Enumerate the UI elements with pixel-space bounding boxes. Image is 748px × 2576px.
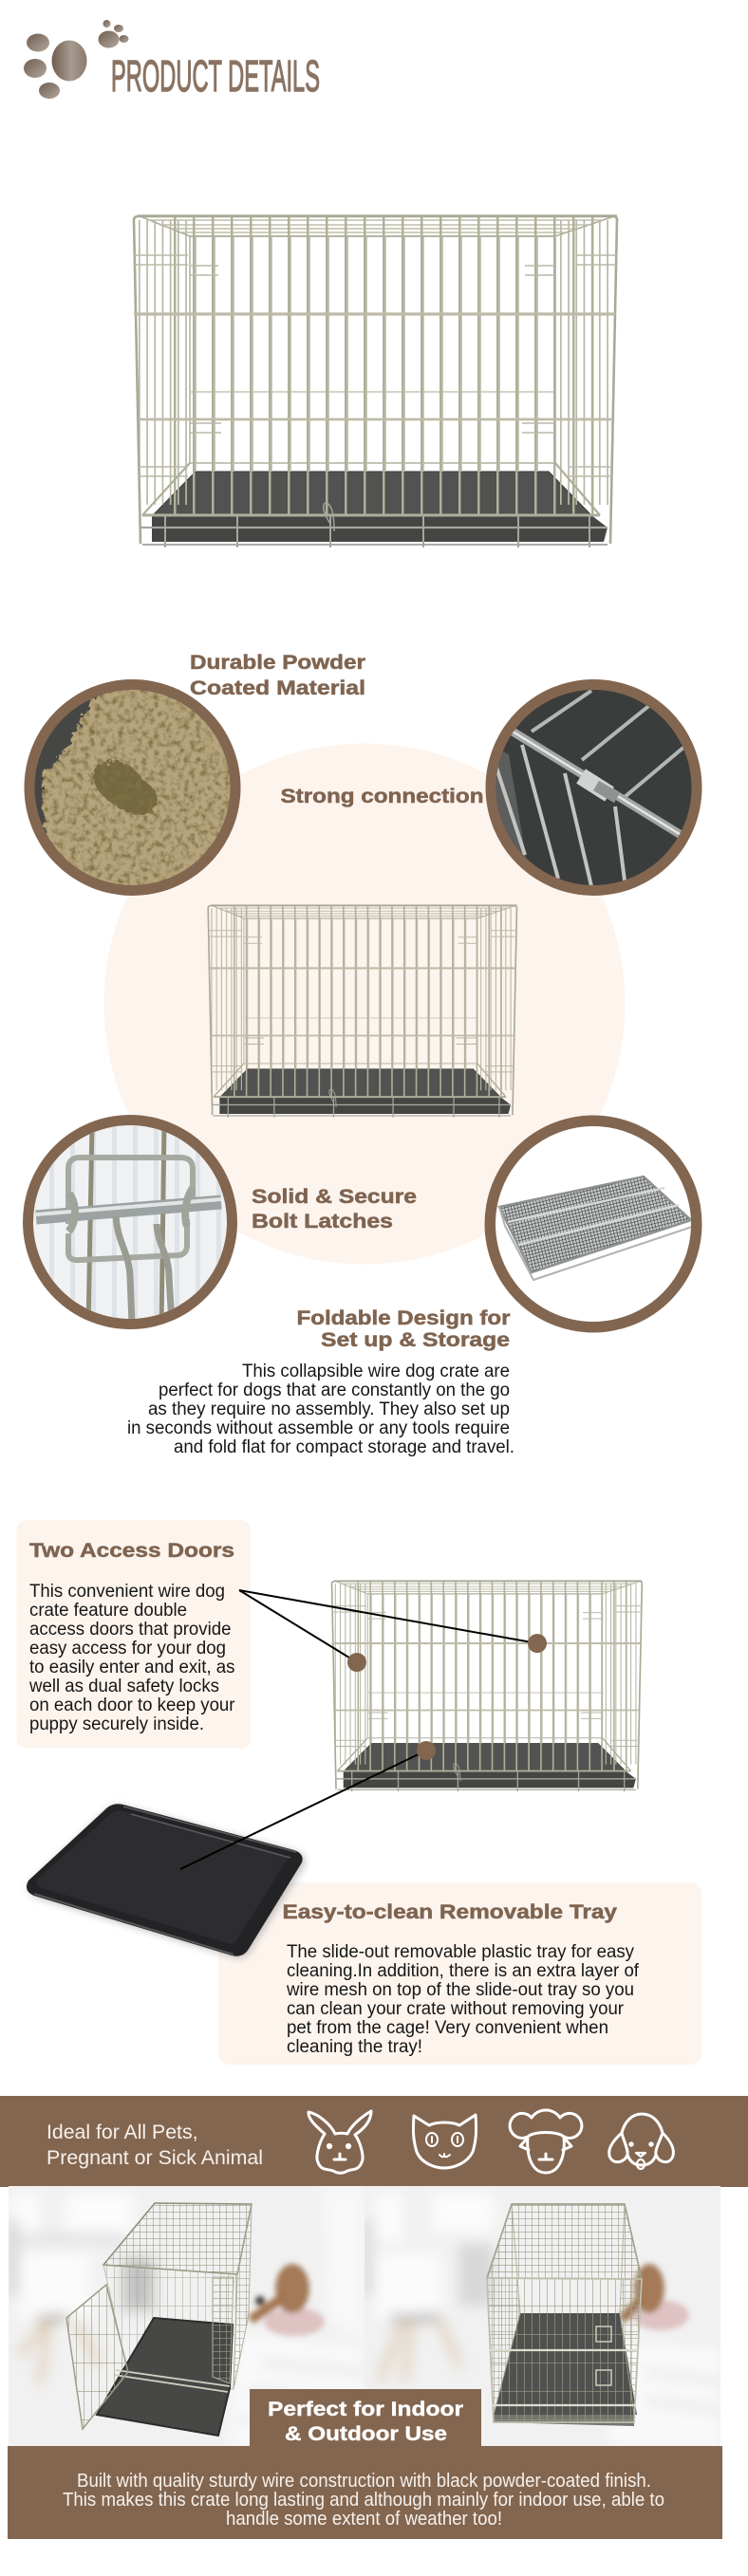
callout lines — [180, 1590, 537, 1869]
heading: solid and secure bolt latches: Solid & Secure — [252, 1186, 417, 1208]
text block: foldable description: perfect for dogs that are constantly on the go — [159, 1381, 510, 1400]
background circle: peach — [104, 744, 625, 1264]
icon: folded crate circle — [484, 1116, 702, 1332]
text block: access doors description: easy access for your dog — [29, 1639, 226, 1659]
product image: main crate — [134, 215, 617, 547]
text block: foldable description: and fold flat for compact storage and travel. — [174, 1437, 514, 1457]
icon: paw prints — [24, 20, 129, 99]
heading: foldable design: Foldable Design for — [296, 1307, 511, 1329]
title: PRODUCT DETAILS — [111, 51, 320, 101]
heading: durable powder coated material: Durable Powder — [190, 652, 365, 674]
text block: tray description — [286, 1942, 640, 2057]
heading: foldable design: Set up & Storage — [321, 1329, 510, 1351]
icon: rabbit — [309, 2111, 371, 2173]
panel: construction description: handle some extent of weather too! — [226, 2509, 502, 2530]
text block: access doors description — [28, 1582, 235, 1734]
product image: black tray — [27, 1804, 306, 1958]
heading: strong connection: Strong connection — [281, 786, 484, 807]
heading: foldable design — [296, 1307, 511, 1351]
text block: tray description: The slide-out removable plastic tray for easy — [287, 1942, 634, 1962]
callout dot: tray — [417, 1741, 436, 1760]
photo: crate front view in bright room — [365, 2186, 720, 2446]
icon: cat — [413, 2115, 477, 2168]
icon: wire connection circle — [486, 679, 702, 896]
icon: sheep — [510, 2110, 582, 2173]
text block: tray description: cleaning the tray! — [287, 2037, 422, 2057]
text block: tray description: can clean your crate without removing your — [287, 1999, 625, 2019]
text block: access doors description: well as dual safety locks — [28, 1677, 219, 1696]
text block: foldable description — [127, 1362, 514, 1457]
heading: removable tray: Easy-to-clean Removable Tray — [283, 1901, 617, 1923]
photo: crate with door open in bright room — [9, 2186, 365, 2446]
text block: tray description: cleaning.In addition, there is an extra layer of — [287, 1961, 640, 1981]
heading: solid and secure bolt latches: Bolt Latches — [252, 1211, 393, 1232]
heading: two access doors: Two Access Doors — [29, 1540, 234, 1562]
product image: centre crate — [208, 905, 516, 1118]
text block: tray description: wire mesh on top of the slide-out tray so you — [286, 1980, 634, 2000]
panel: perfect for indoor and outdoor use: & Outdoor Use — [285, 2423, 447, 2445]
text block: ideal for all pets: Pregnant or Sick Animal — [47, 2147, 263, 2169]
panel: construction description — [8, 2446, 722, 2539]
text block: foldable description: This collapsible wire dog crate are — [242, 1362, 510, 1381]
panel: construction description: Built with quality sturdy wire construction with black powder-coated finish. — [77, 2471, 651, 2492]
panel: removable tray — [218, 1882, 701, 2065]
icon: powder material circle — [25, 679, 241, 897]
icon: bolt latch circle — [23, 1115, 237, 1329]
heading: solid and secure bolt latches — [252, 1186, 417, 1232]
text block: tray description: pet from the cage! Very convenient when — [287, 2018, 608, 2038]
banner: ideal for all pets — [0, 2096, 748, 2187]
text block: foldable description: as they require no assembly. They also set up — [148, 1399, 510, 1419]
product image: annotated crate — [332, 1581, 642, 1791]
text block: access doors description: crate feature double — [29, 1601, 187, 1621]
heading: durable powder coated material: Coated Material — [190, 677, 365, 699]
icon: dog — [609, 2114, 673, 2169]
text block: access doors description: to easily enter and exit, as — [29, 1658, 235, 1677]
panel: two access doors — [17, 1520, 251, 1748]
text block: ideal for all pets — [47, 2122, 263, 2169]
panel: perfect for indoor and outdoor use: Perfect for Indoor — [268, 2399, 463, 2420]
text block: access doors description: puppy securely inside. — [29, 1714, 204, 1734]
panel: perfect for indoor and outdoor use — [250, 2389, 481, 2448]
text block: access doors description: on each door to keep your — [29, 1696, 235, 1715]
callout dot: side door — [347, 1653, 366, 1672]
heading: durable powder coated material — [190, 652, 365, 699]
text block: access doors description: This convenient wire dog — [29, 1582, 225, 1602]
text block: ideal for all pets: Ideal for All Pets, — [47, 2122, 197, 2143]
text block: access doors description: access doors that provide — [29, 1620, 232, 1640]
text block: foldable description: in seconds without assemble or any tools require — [127, 1418, 510, 1438]
panel: construction description: This makes this crate long lasting and although mainly for indoor use, able to — [63, 2490, 664, 2511]
callout dot: front door — [528, 1634, 547, 1653]
